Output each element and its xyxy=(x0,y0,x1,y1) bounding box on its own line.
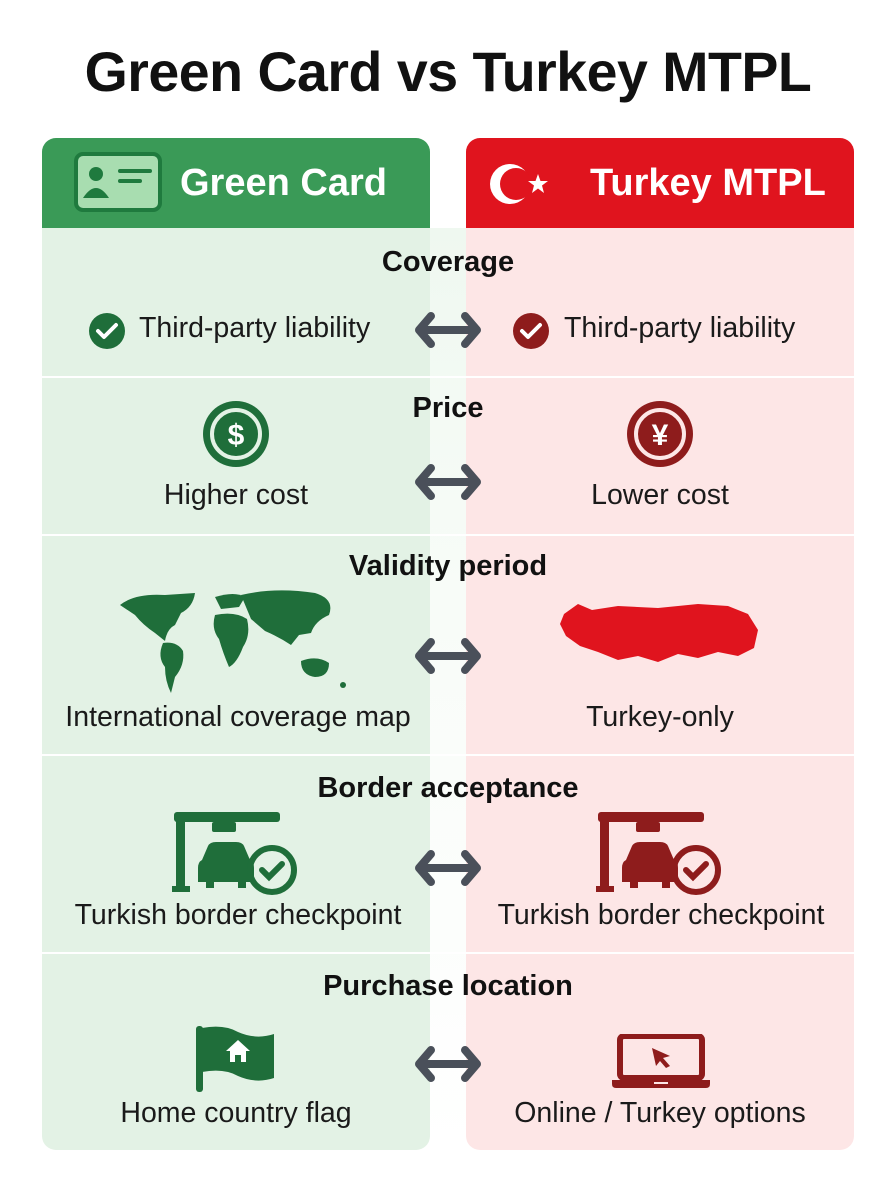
coverage left: Third-party liability xyxy=(139,312,370,344)
label: Online / Turkey options xyxy=(514,1097,806,1129)
header: turkey mtpl xyxy=(466,138,854,228)
arrow xyxy=(415,638,481,674)
panel: green card xyxy=(42,138,430,1150)
coverage right: Third-party liability xyxy=(564,312,795,344)
heading: price: Price xyxy=(413,392,483,424)
icon: yen xyxy=(627,401,693,467)
middle strip xyxy=(430,228,466,1150)
title: Green Card vs Turkey MTPL xyxy=(85,41,811,103)
icon: world map xyxy=(120,590,346,693)
icon: checkpoint green xyxy=(172,812,297,895)
icon: yen: ¥ xyxy=(652,419,669,452)
heading: validity: Validity period xyxy=(349,550,547,582)
label: international: International coverage map xyxy=(65,701,411,733)
arrow xyxy=(415,464,481,500)
icon: dollar xyxy=(203,401,269,467)
panel: turkey mtpl xyxy=(466,138,854,1150)
arrow xyxy=(415,1046,481,1082)
separators xyxy=(42,376,854,378)
icon: turkey map xyxy=(560,604,758,662)
heading: border: Border acceptance xyxy=(317,772,579,804)
heading: purchase: Purchase location xyxy=(323,970,573,1002)
label: turkey only: Turkey-only xyxy=(586,701,734,733)
arrow xyxy=(415,850,481,886)
icon: laptop xyxy=(612,1034,710,1088)
header text: Green Card xyxy=(180,162,387,204)
heading: coverage: Coverage xyxy=(382,246,514,278)
label: Turkish border checkpoint xyxy=(75,899,401,931)
label: Turkish border checkpoint xyxy=(498,899,824,931)
icon: id card xyxy=(74,152,162,212)
icon: checkpoint red xyxy=(596,812,721,895)
header text: Turkey MTPL xyxy=(590,162,826,204)
label: lower cost: Lower cost xyxy=(591,479,729,511)
label: higher cost: Higher cost xyxy=(164,479,308,511)
label: Home country flag xyxy=(120,1097,352,1129)
icon: flag xyxy=(196,1026,274,1092)
icon: crescent star xyxy=(490,164,548,204)
icon: dollar: $ xyxy=(228,419,245,452)
header: green card xyxy=(42,138,430,228)
arrow xyxy=(415,312,481,348)
